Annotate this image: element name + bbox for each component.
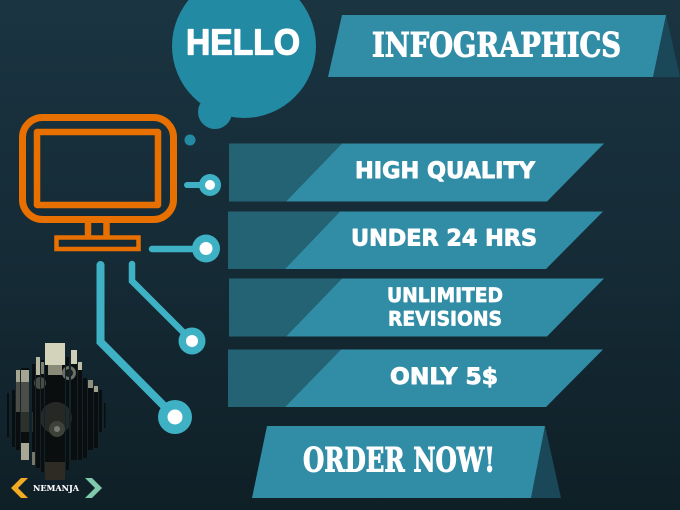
logo: striped gas mask figure bbox=[7, 343, 106, 480]
panel: unlimited revisions bbox=[229, 278, 604, 336]
speech bubble: hello bbox=[172, 0, 316, 146]
label: high quality: HIGH QUALITY bbox=[355, 158, 536, 184]
panel: high quality bbox=[229, 144, 604, 202]
label: only 5$: ONLY 5$ bbox=[390, 364, 498, 390]
connector 1 bbox=[187, 174, 221, 196]
panel: only 5$ bbox=[228, 350, 603, 407]
logo: right chevron bbox=[85, 478, 102, 498]
heading: hello: HELLO bbox=[186, 22, 300, 62]
panel: under 24 hrs bbox=[228, 212, 603, 269]
icon: orange monitor bbox=[22, 118, 174, 249]
button: order now bbox=[252, 426, 561, 498]
heading: infographics: INFOGRAPHICS bbox=[372, 26, 621, 64]
label: unlimited revisions: UNLIMITED bbox=[387, 284, 503, 307]
connector 2 bbox=[152, 234, 220, 262]
logo: left chevron bbox=[11, 478, 28, 498]
button label: ORDER NOW! bbox=[303, 440, 495, 480]
label: unlimited revisions: REVISIONS bbox=[388, 308, 502, 330]
label: under 24 hrs: UNDER 24 HRS bbox=[351, 226, 537, 252]
logo: name: NEMANJA bbox=[33, 484, 79, 494]
title banner bbox=[328, 15, 680, 77]
connector 3 bbox=[132, 264, 206, 354]
connector 4 bbox=[100, 265, 192, 434]
